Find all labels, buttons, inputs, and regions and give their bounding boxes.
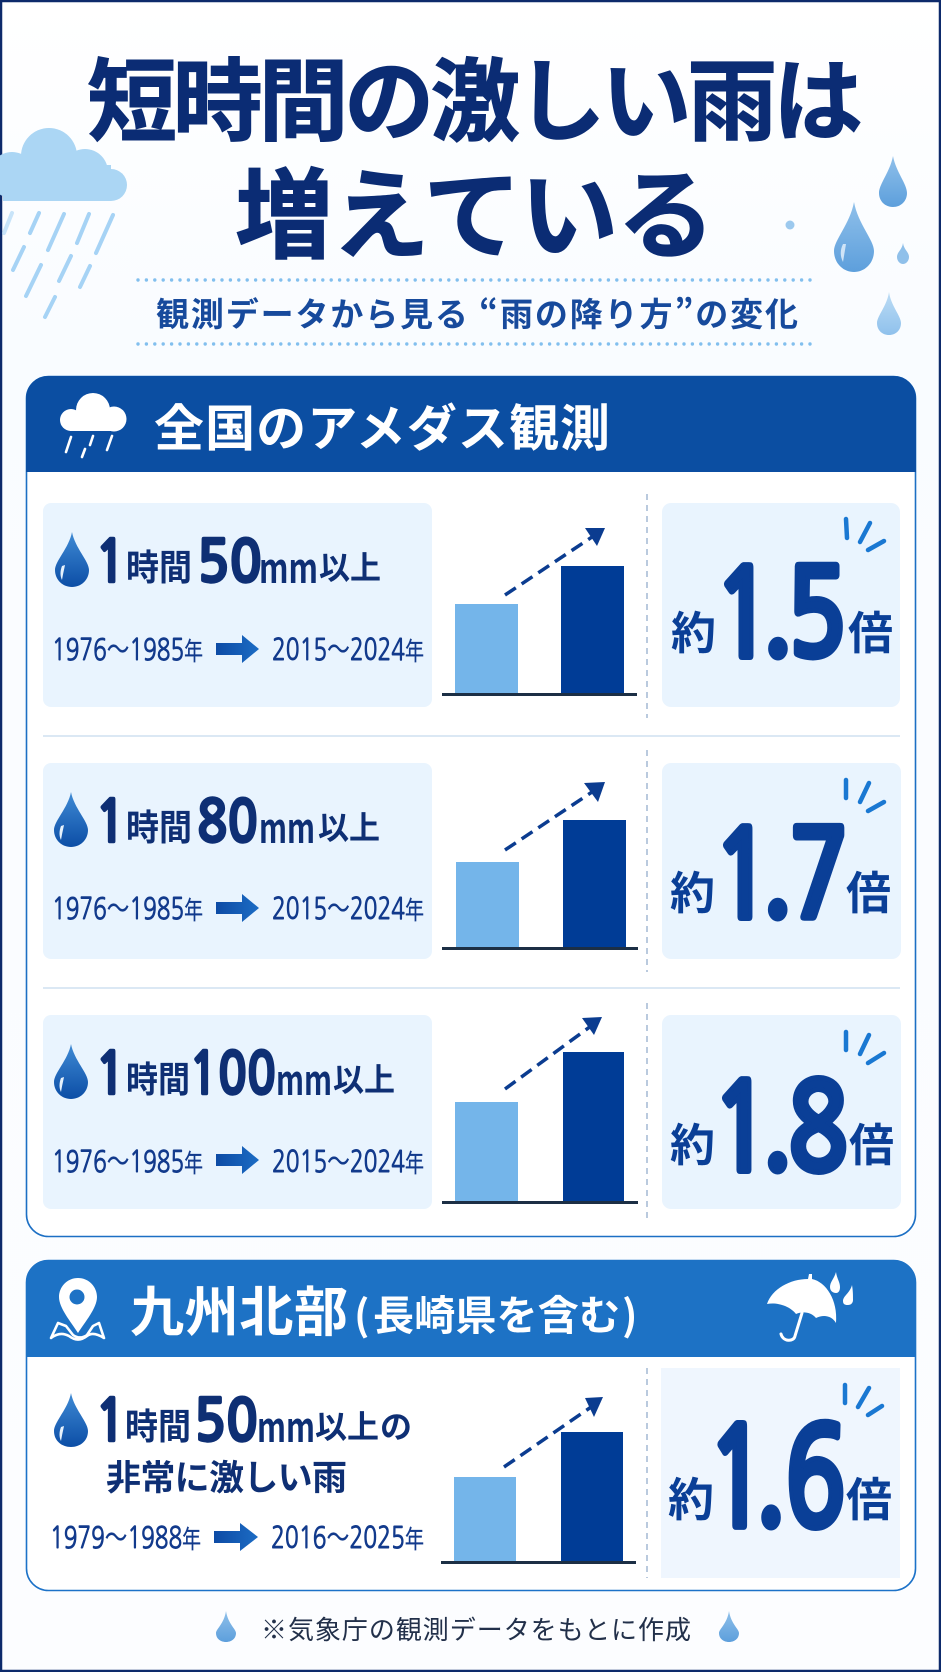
panel header bar [26,1260,916,1357]
panel sub-heading: ) [622,1282,638,1342]
heading text: 時間 [126,1051,190,1103]
multiplier callout: 1.5 [713,548,847,675]
period comparison: 2015～2024年 [272,1137,424,1181]
decoration: rain cloud [0,128,127,317]
period comparison: 2016～2025年 [271,1513,424,1557]
panel header bar [26,376,916,472]
heading text: 1 [95,1392,126,1450]
multiplier callout [662,763,901,959]
heading text: 1 [95,793,126,851]
multiplier callout: 約 [670,1109,715,1174]
panel sub-heading: 長崎県を含む [373,1282,620,1342]
footnote: ※気象庁の観測データをもとに作成 [261,1610,691,1647]
row: 50mm nationwide [43,494,900,718]
row: 50mm northern Kyushu [50,1368,892,1578]
period comparison [52,1137,424,1181]
multiplier callout: 倍 [848,597,893,662]
label box [43,503,432,707]
period comparison: 1979～1988年 [50,1513,201,1557]
panel heading: 全国のアメダス観測 [154,389,610,461]
icon: cloud with rain [60,393,126,457]
heading text: 以上 [315,1402,379,1448]
multiplier callout: 倍 [846,1464,892,1530]
heading text: 非常に激しい雨 [106,1450,347,1501]
multiplier callout: 倍 [846,857,891,922]
icon: drop [55,532,89,587]
period comparison [52,884,424,928]
heading text: mm [276,1047,332,1107]
multiplier callout: 1.7 [712,809,850,936]
heading text: mm [259,795,315,855]
icon: drop [54,792,88,847]
heading text: 100 [189,1045,276,1103]
row: 100mm nationwide [43,1003,901,1220]
period comparison: 1976～1985年 [52,1137,203,1181]
multiplier callout: 約 [671,597,716,662]
period comparison: 1976～1985年 [52,884,203,928]
heading text: 時間 [125,1398,191,1450]
heading text: mm [259,535,318,595]
heading text [95,793,380,855]
heading text: 80 [197,793,258,851]
heading text: 1 [95,1045,126,1103]
decoration: water drops [786,156,909,335]
panel sub-heading: ( [354,1282,370,1342]
title: 短時間の激しい雨は [87,29,863,159]
icon: location pin over water [51,1278,104,1340]
icon: drop [54,1044,88,1099]
heading text [95,533,381,595]
right tinted result area [661,1368,900,1578]
bar chart [442,1017,638,1204]
period comparison [50,1513,424,1557]
period comparison [52,625,424,669]
multiplier callout [662,1015,901,1209]
icon: umbrella with drops [767,1272,853,1340]
heading text [95,1392,412,1501]
row: 80mm nationwide [43,750,901,972]
multiplier callout: 約 [668,1464,714,1530]
period comparison: 2015～2024年 [272,625,424,669]
label box [43,1015,432,1209]
panel heading: 九州北部 [130,1268,348,1347]
multiplier callout: 1.6 [706,1404,847,1548]
bar chart [441,1397,636,1564]
period comparison: 1976～1985年 [52,625,203,669]
heading text [95,1045,395,1107]
panel: nationwide AMeDAS [26,376,916,1236]
heading text: 以上 [318,803,380,849]
icon: drop [54,1393,88,1447]
bar chart [442,782,638,950]
heading text: mm [257,1394,315,1454]
heading text: 50 [197,533,262,591]
multiplier callout: 倍 [849,1109,894,1174]
title [87,29,863,279]
multiplier callout: 1.8 [711,1062,849,1189]
heading text: 時間 [126,799,192,851]
multiplier callout [662,503,900,707]
label box [43,763,432,959]
subtitle with dotted rules: 観測データから見る “雨の降り方”の変化 [156,288,798,336]
heading text: 以上 [319,543,381,589]
heading text: の [380,1402,412,1448]
title: 増えている [235,137,715,279]
heading text: 50 [194,1392,258,1450]
heading text: 1 [95,533,126,591]
panel: northern Kyushu [26,1260,916,1590]
multiplier callout [668,1385,892,1548]
heading text: 以上 [333,1055,395,1101]
bar chart [442,528,637,696]
multiplier callout: 約 [670,857,715,922]
heading text: 時間 [126,539,192,591]
period comparison: 2015～2024年 [272,884,424,928]
